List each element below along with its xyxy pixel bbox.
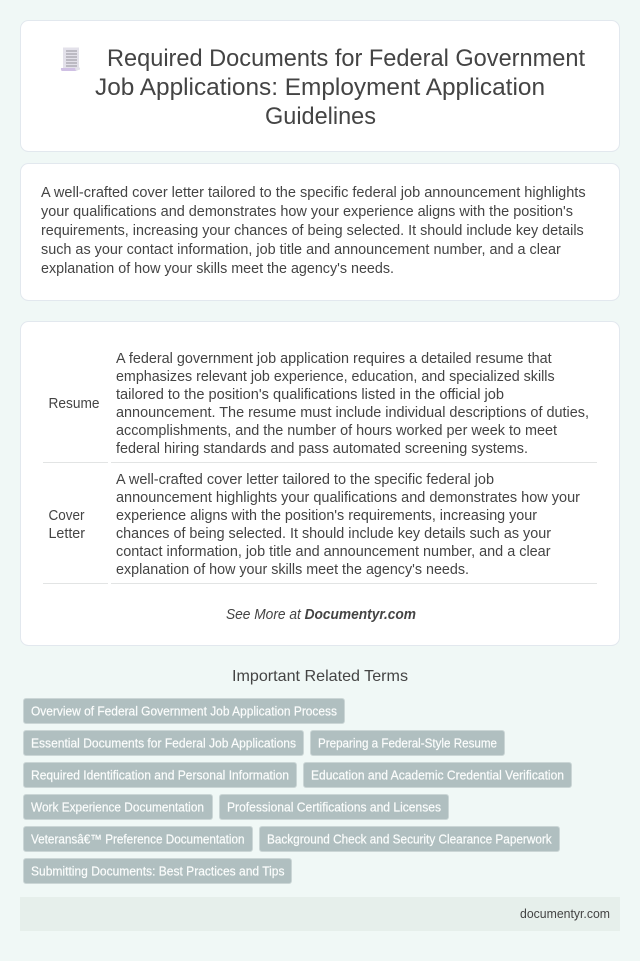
chip: Essential Documents for Federal Job Applications — [31, 736, 296, 750]
see more link: See More at Documentyr.com — [226, 607, 416, 623]
resume description: emphasizes relevant job experience, education, and specialized skills — [116, 369, 555, 385]
cover letter description: contact information, job title and announcement number, and a clear — [116, 544, 551, 560]
chip: Work Experience Documentation — [31, 800, 204, 814]
chip — [260, 826, 560, 852]
title: Guidelines — [265, 103, 376, 130]
intro text: such as your contact information, job title and announcement number, and a clear — [41, 242, 561, 258]
chip: Professional Certifications and Licenses — [227, 800, 441, 814]
chip — [24, 730, 304, 756]
cover letter description — [116, 472, 580, 578]
intro text: requirements, increasing your chances of being selected. It should include key details — [41, 223, 584, 239]
title: Job Applications: Employment Application — [95, 74, 545, 101]
panel: title card — [20, 20, 620, 152]
chip — [24, 794, 212, 820]
footer bar — [20, 897, 620, 931]
chip: Veteransâ€™ Preference Documentation — [31, 832, 245, 846]
intro text: A well-crafted cover letter tailored to the specific federal job announcement highlights — [41, 185, 586, 201]
panel: intro paragraph — [20, 164, 620, 300]
chip — [220, 794, 448, 820]
chip: Required Identification and Personal Information — [31, 768, 289, 782]
chip — [24, 826, 252, 852]
related term chips — [24, 698, 572, 884]
cover letter label: Cover — [48, 508, 85, 524]
footer text: documentyr.com — [520, 907, 610, 921]
intro text: your qualifications and demonstrates how your experience aligns with the position's — [41, 204, 573, 220]
chip: Submitting Documents: Best Practices and Tips — [31, 864, 284, 878]
resume description: accomplishments, and the number of hours worked per week to meet — [116, 423, 557, 439]
row: cover letter — [48, 472, 580, 578]
row: resume — [48, 351, 589, 457]
cover letter label: Letter — [48, 526, 85, 542]
chip — [310, 730, 504, 756]
title — [95, 45, 585, 130]
resume label: Resume — [48, 396, 100, 412]
chip: Background Check and Security Clearance Paperwork — [267, 832, 552, 846]
title: Required Documents for Federal Government — [107, 45, 585, 72]
resume description: announcement. The resume must include individual descriptions of duties, — [116, 405, 589, 421]
cover letter description: experience aligns with the position's requirements, increasing your — [116, 508, 537, 524]
chip — [304, 762, 572, 788]
intro text: explanation of how your skills meet the agency's needs. — [41, 261, 394, 277]
cover letter description: A well-crafted cover letter tailored to the specific federal job — [116, 472, 494, 488]
cover letter label — [48, 508, 85, 542]
chip — [24, 698, 344, 724]
panel: documents table — [20, 322, 620, 646]
resume description: tailored to the position's qualifications listed in the official job — [116, 387, 504, 403]
cover letter description: chances of being selected. It should include key details such as your — [116, 526, 551, 542]
cover letter description: announcement highlights your qualifications and demonstrates how your — [116, 490, 580, 506]
chip: Preparing a Federal-Style Resume — [318, 736, 497, 750]
chip: Education and Academic Credential Verification — [311, 768, 564, 782]
cover letter description: explanation of how your skills meet the agency's needs. — [116, 562, 469, 578]
resume description: A federal government job application requires a detailed resume that — [116, 351, 552, 367]
chip — [24, 762, 296, 788]
icon: document scroll — [61, 48, 80, 71]
chip — [24, 858, 292, 884]
heading: related terms: Important Related Terms — [232, 668, 408, 685]
intro text — [41, 185, 586, 277]
resume description — [116, 351, 589, 457]
resume description: federal hiring standards and pass automated screening systems. — [116, 441, 528, 457]
chip: Overview of Federal Government Job Application Process — [31, 704, 337, 718]
